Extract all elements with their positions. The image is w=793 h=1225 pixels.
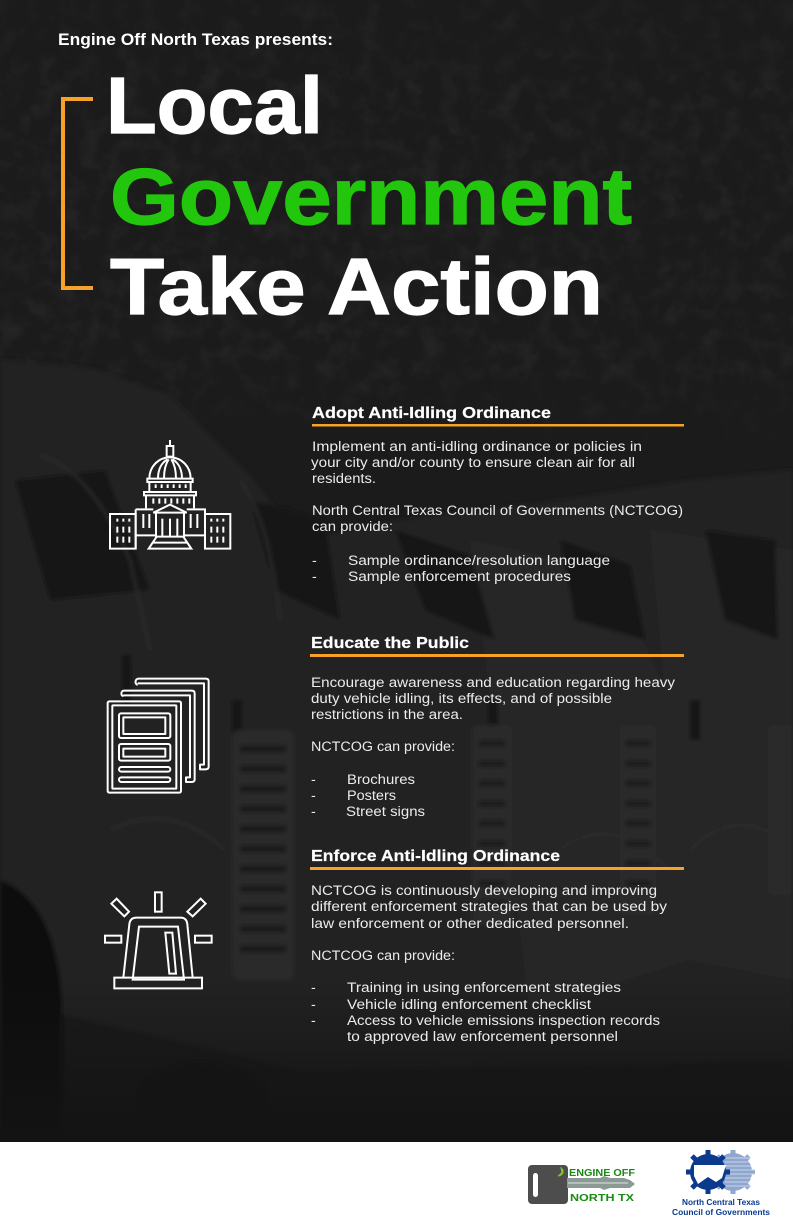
panel: adopt ordinance: - [312,553,317,569]
panel: educate the public: - [311,804,316,820]
panel: enforce ordinance: different enforcement strategies that can be used by [311,899,668,915]
panel: educate the public: Street signs [346,804,425,820]
panel: enforce ordinance: Vehicle idling enforcement checklist [347,997,591,1013]
logo: Engine Off North TX [528,1165,636,1204]
panel: adopt ordinance: your city and/or county to ensure clean air for all [311,455,635,471]
panel: enforce ordinance: Training in using enforcement strategies [347,980,621,996]
panel: educate the public: Posters [347,788,396,804]
title [106,61,632,331]
panel: educate the public: - [311,772,316,788]
panel: educate the public: duty vehicle idling, its effects, and of possible [311,691,612,707]
icon: stacked documents [108,679,209,793]
panel: enforce ordinance: - [311,997,316,1013]
intro line: Engine Off North Texas presents: [58,30,333,49]
heading: adopt: Adopt Anti-Idling Ordinance [312,405,551,422]
footer band [0,1142,793,1225]
panel: adopt ordinance: Implement an anti-idling ordinance or policies in [312,439,642,455]
icon: capitol building [110,440,230,549]
title: Government [110,152,632,241]
panel: educate the public: restrictions in the area. [311,707,463,723]
panel: adopt ordinance: Sample ordinance/resolution language [348,553,610,569]
panel: adopt ordinance: can provide: [312,519,393,535]
logo: North Central Texas Council of Governments [672,1150,770,1217]
panel: educate the public: NCTCOG can provide: [311,739,455,755]
panel: educate the public [310,635,684,820]
panel: enforce ordinance: to approved law enforcement personnel [347,1029,618,1045]
heading: enforce: Enforce Anti-Idling Ordinance [311,848,560,865]
panel: enforce ordinance [310,848,684,1045]
logo: North Central Texas Council of Governments: Council of Governments [672,1207,770,1217]
panel: adopt ordinance: - [312,569,317,585]
panel: adopt ordinance: residents. [312,471,376,487]
panel: adopt ordinance [311,405,684,585]
title bracket [63,99,93,288]
logo: Engine Off North TX: ENGINE OFF [569,1167,636,1179]
panel: educate the public: Brochures [347,772,415,788]
panel: enforce ordinance: - [311,980,316,996]
panel: enforce ordinance: law enforcement or other dedicated personnel. [311,916,629,932]
panel: enforce ordinance: NCTCOG is continuously developing and improving [311,883,657,899]
title: Take Action [110,242,603,331]
logo: Engine Off North TX: NORTH TX [570,1192,634,1204]
title: Local [106,61,323,150]
panel: enforce ordinance: Access to vehicle emissions inspection records [347,1013,660,1029]
logo: North Central Texas Council of Governments: North Central Texas [682,1197,760,1207]
panel: enforce ordinance: NCTCOG can provide: [311,948,455,964]
panel: educate the public: - [311,788,316,804]
icon: siren light [105,892,212,988]
panel: adopt ordinance: North Central Texas Council of Governments (NCTCOG) [312,503,683,519]
panel: educate the public: Encourage awareness and education regarding heavy [311,675,676,691]
heading: educate: Educate the Public [311,635,469,652]
panel: adopt ordinance: Sample enforcement procedures [348,569,571,585]
panel: enforce ordinance: - [311,1013,316,1029]
